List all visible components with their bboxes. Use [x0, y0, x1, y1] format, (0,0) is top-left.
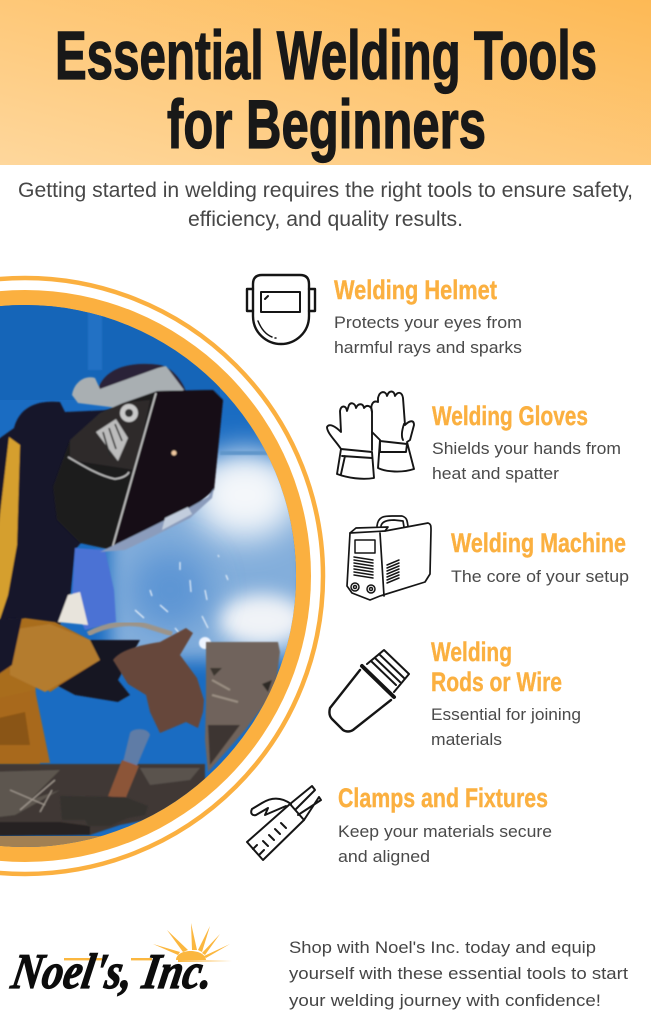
- heading: Welding Helmet: [334, 275, 497, 305]
- logo: Noel's, Inc.: [7, 923, 232, 999]
- icon: rods in holder: [329, 650, 409, 732]
- inner gold ring: [0, 290, 311, 862]
- icon: clamp: [247, 786, 321, 860]
- title: [55, 17, 597, 163]
- icon: machine: [347, 516, 431, 600]
- welder photo illustration: [0, 305, 296, 847]
- item: welding rods or wire: [329, 637, 581, 749]
- description: [334, 314, 522, 357]
- icon: sun rays: [64, 923, 232, 962]
- description: and aligned: [338, 848, 430, 866]
- description: harmful rays and sparks: [334, 339, 522, 357]
- heading: Welding: [431, 637, 512, 667]
- item: clamps and fixtures: [247, 783, 552, 866]
- description: [338, 823, 552, 866]
- description: heat and spatter: [432, 465, 560, 483]
- heading: [431, 637, 562, 697]
- item: welding helmet: [247, 275, 522, 357]
- description: Keep your materials secure: [338, 823, 552, 841]
- heading: Rods or Wire: [431, 667, 562, 697]
- call to action text: your welding journey with confidence!: [289, 991, 601, 1010]
- welding helmet in photo: [53, 364, 223, 552]
- intro text: Getting started in welding requires the right tools to ensure safety,: [18, 179, 633, 202]
- outer gold ring: [0, 278, 323, 874]
- workbench: [0, 764, 205, 836]
- description: [431, 706, 581, 749]
- heading: Clamps and Fixtures: [338, 783, 548, 813]
- icon: gloves: [327, 392, 414, 479]
- welding glove: [113, 628, 204, 733]
- header banner: [0, 0, 651, 165]
- welder arm and jacket: [0, 618, 140, 765]
- description: materials: [431, 731, 502, 749]
- icon: helmet: [247, 275, 315, 344]
- metal block: [205, 642, 280, 772]
- description: Shields your hands from: [432, 440, 621, 458]
- description: [432, 440, 621, 483]
- weld spark: [199, 637, 211, 649]
- item: welding machine: [347, 516, 629, 600]
- description: Essential for joining: [431, 706, 581, 724]
- welder body: [0, 402, 116, 630]
- description: Protects your eyes from: [334, 314, 522, 332]
- description: The core of your setup: [451, 568, 629, 586]
- heading: Welding Gloves: [432, 401, 588, 431]
- smoke and light glow: [110, 451, 310, 660]
- call to action text: Shop with Noel's Inc. today and equip: [289, 938, 596, 957]
- hammer: [60, 729, 150, 826]
- intro text: [18, 179, 633, 231]
- call to action text: [289, 938, 628, 1010]
- title: for Beginners: [167, 86, 486, 163]
- intro text: efficiency, and quality results.: [188, 208, 463, 231]
- call to action text: yourself with these essential tools to start: [289, 964, 628, 983]
- welding torch: [88, 624, 172, 634]
- wordmark: Noel's, Inc.: [7, 943, 218, 999]
- item: welding gloves: [327, 392, 621, 483]
